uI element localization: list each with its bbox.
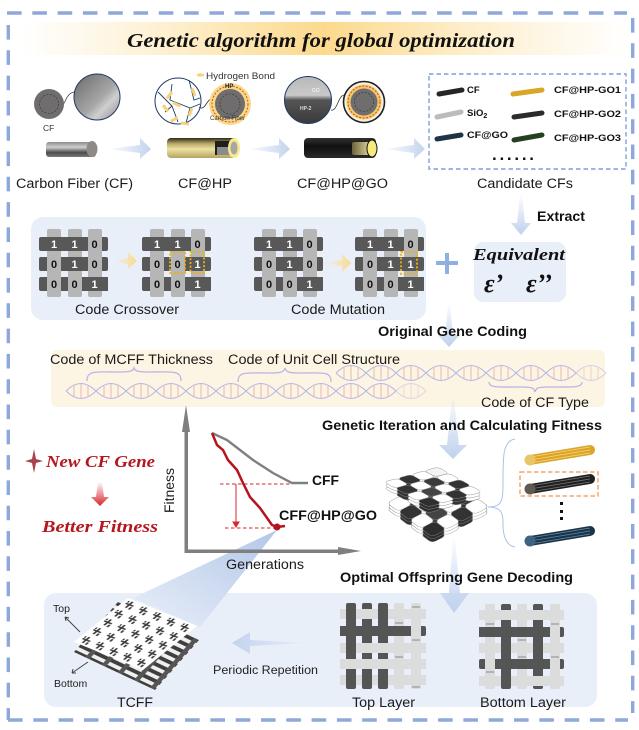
- icon: star: [25, 449, 43, 473]
- arrow: crossover: [112, 252, 137, 269]
- candidate fiber names: CF@GO: [467, 130, 508, 141]
- weave code grid 4 with mutation: 0: [387, 279, 394, 291]
- weave code grid 1: 1: [91, 279, 98, 291]
- candidate fiber names: CF@HP-GO2: [554, 109, 621, 120]
- label: Carbon Fiber (CF): Carbon Fiber (CF): [16, 176, 133, 191]
- label: bottom layer: Bottom Layer: [480, 695, 567, 710]
- weave code grid 3: 0: [306, 239, 313, 251]
- weave code grid 1: 0: [91, 239, 98, 251]
- weave code grid 2 with crossover: 0: [154, 259, 160, 271]
- weave code grid 3: 0: [306, 259, 313, 271]
- candidate fiber names: CF@HP-GO1: [554, 85, 622, 96]
- icon: bare carbon fiber cylinder: [46, 141, 98, 157]
- weave code grid 4 with mutation: 1: [407, 279, 414, 291]
- weave code grid 4 with mutation: 1: [387, 259, 394, 271]
- label: Code Mutation: Code Mutation: [291, 302, 385, 317]
- label: Original Gene Coding: Original Gene Coding: [378, 324, 527, 339]
- weave code grid 2 with crossover: 0: [194, 239, 201, 251]
- bottom sheet: [74, 602, 199, 690]
- x label: Generations: [226, 557, 304, 572]
- callout: new gene better fitness: [25, 449, 158, 536]
- weave code grid 3: 0: [286, 279, 293, 291]
- weave code grid 3: 0: [266, 259, 272, 271]
- legend: hydrogen bond: Hydrogen Bond: [206, 71, 275, 81]
- weave code grid 3: 1: [286, 259, 293, 271]
- label: top layer: Top Layer: [352, 695, 416, 710]
- callout: new gene better fitness: Better Fitness: [41, 517, 158, 536]
- weave code grid 1: [39, 229, 108, 297]
- panel: equivalent permittivity: ε’’: [526, 269, 552, 298]
- curve labels: CFF: [312, 473, 339, 488]
- panel: equivalent permittivity: ε’: [484, 269, 503, 298]
- curve labels: [279, 473, 377, 523]
- label: genetic iteration: Genetic Iteration and Calculating Fitness: [322, 418, 602, 433]
- arrow: CF@HP to CF@HP@GO: [247, 138, 290, 159]
- callout: new gene better fitness: New CF Gene: [45, 452, 155, 471]
- label: CF@HP: CF@HP: [178, 176, 232, 191]
- brace: CF type: [489, 382, 582, 392]
- weave code grid 2 with crossover: 1: [194, 279, 201, 291]
- weave code grid 1: 0: [51, 259, 57, 271]
- arrow: bottom: [72, 662, 88, 673]
- label: Extract: Extract: [537, 209, 586, 224]
- y label: Fitness: [162, 468, 177, 513]
- icon: CF cross section: CF: [43, 123, 54, 133]
- weave code grid 2 with crossover: 1: [174, 239, 181, 251]
- weave: top layer: [340, 603, 426, 689]
- more dots: [560, 502, 563, 520]
- label: Candidate CFs: Candidate CFs: [477, 176, 573, 191]
- top sheet: [74, 598, 197, 670]
- panel: equivalent permittivity: [472, 242, 566, 302]
- weave code grid 1: 0: [51, 279, 57, 291]
- arrow: genetic iteration: [439, 398, 467, 459]
- arrow: mutation: [323, 254, 351, 272]
- weave code grid 4 with mutation: 0: [407, 239, 414, 251]
- icon: microscopy circle: HP-2: [300, 106, 312, 112]
- DNA strand upper: [336, 366, 606, 380]
- label: decoding: Optimal Offspring Gene Decoding: [340, 570, 573, 585]
- reference dashes and drop arrow: [220, 484, 292, 528]
- weave code grid 4 with mutation: 0: [367, 279, 373, 291]
- CFF@HP@GO curve: [212, 433, 285, 530]
- weave code grid 4 with mutation: 1: [407, 259, 414, 271]
- curve labels: CFF@HP@GO: [279, 508, 377, 523]
- title banner: [18, 22, 630, 55]
- title banner: Genetic algorithm for global optimization: [127, 31, 515, 52]
- weave code grid 4 with mutation: 0: [367, 259, 373, 271]
- arrow: decoding: [440, 540, 469, 613]
- icon: microscopy circle: [284, 76, 332, 124]
- arrow: periodic repetition: [232, 632, 310, 654]
- label: TCFF: TCFF: [117, 695, 153, 710]
- brace: unit cell: [238, 368, 331, 382]
- weave code grid 2 with crossover: 0: [154, 279, 160, 291]
- weave code grid 2 with crossover: 0: [174, 259, 181, 271]
- brace: MCFF thickness: [87, 368, 181, 381]
- axes: [182, 405, 361, 555]
- rod: black: [524, 476, 590, 494]
- icon: coated fiber cross section: HP: [225, 84, 233, 90]
- DNA strand lower: [66, 384, 426, 398]
- arrow: top: [65, 617, 80, 632]
- label: code of MCFF thickness: Code of MCFF Thickness: [50, 352, 213, 367]
- weave code grid 1: 1: [51, 239, 57, 251]
- labels: top and bottom: Bottom: [54, 678, 88, 690]
- panel: CF@HP@GO: [284, 76, 388, 191]
- labels: top and bottom: [53, 603, 88, 690]
- chart: fitness against generations: [162, 405, 377, 572]
- weave code grid 4 with mutation: 1: [367, 239, 373, 251]
- icon: GO-coated cross section: [331, 82, 384, 122]
- brace to fiber options: [488, 439, 515, 547]
- icon: coated fiber cross section: [199, 83, 251, 125]
- label: periodic repetition: Periodic Repetition: [213, 665, 318, 677]
- rod: blue: [524, 528, 590, 546]
- weave code grid 1: 0: [71, 279, 78, 291]
- label: code of CF type: Code of CF Type: [481, 395, 589, 410]
- weave code grid 1: 0: [91, 259, 98, 271]
- weave: bottom layer: [479, 604, 564, 689]
- weave code grid 3: 1: [266, 239, 272, 251]
- panel: carbon fiber: [16, 74, 133, 191]
- labels: top and bottom: Top: [53, 603, 70, 615]
- weave code grid 1: 1: [71, 259, 78, 271]
- rod: gold: [524, 447, 590, 466]
- candidate fiber names: CF@HP-GO3: [554, 133, 621, 144]
- bottom panel: periodic structure: [44, 593, 597, 707]
- weave code grid 2 with crossover: 1: [194, 259, 201, 271]
- weave code grid 2 with crossover: 0: [174, 279, 181, 291]
- label: Code Crossover: Code Crossover: [75, 302, 180, 317]
- CFF curve: [212, 433, 308, 483]
- weave code grid 2 with crossover: [142, 229, 211, 297]
- icon: coated fiber cross section: Carbon Fiber: [210, 116, 245, 122]
- label: CF@HP@GO: CF@HP@GO: [297, 176, 388, 191]
- weave code grid 4 with mutation: [355, 229, 424, 297]
- panel: DNA gene code: [50, 350, 606, 410]
- weave code grid 3: 1: [306, 279, 313, 291]
- arrow: extract: [511, 196, 531, 235]
- candidate fiber names: ......: [492, 145, 534, 164]
- candidate fiber names: SiO: [467, 108, 483, 119]
- weave code grid 2 with crossover: 1: [154, 239, 160, 251]
- weave code grid 3: [254, 229, 323, 297]
- candidate fiber names: [467, 85, 622, 164]
- panel: equivalent permittivity: Equivalent: [472, 245, 566, 264]
- panel: code operations: [31, 217, 426, 320]
- icon: TCFF layered structure: [53, 598, 199, 690]
- arrow: red down: [91, 482, 109, 506]
- label: code of unit cell structure: Code of Unit Cell Structure: [228, 352, 400, 367]
- candidate fiber names: 2: [483, 113, 487, 120]
- arrow: CF@HP@GO to candidates: [383, 138, 425, 159]
- candidate fiber names: CF: [467, 85, 480, 96]
- arrow: CF to CF@HP: [107, 138, 151, 159]
- panel: CF@HP: [155, 71, 275, 191]
- icon: plus: [436, 253, 458, 274]
- fiber options: [520, 447, 598, 546]
- highlight box: [520, 472, 598, 496]
- zoom cone to TCFF: [133, 530, 277, 627]
- weave code grid 4 with mutation: 1: [387, 239, 394, 251]
- icon: microscopy circle: GO: [312, 88, 320, 94]
- panel: candidate CFs: [429, 74, 626, 169]
- weave code grid 1: 1: [71, 239, 78, 251]
- arrow: original gene coding: [438, 305, 460, 347]
- candidate fiber rods: [437, 90, 542, 140]
- icon: GO-coated cylinder: [304, 138, 377, 158]
- icon: polymer network: [155, 78, 201, 126]
- weave code grid 3: 1: [286, 239, 293, 251]
- weave code grid 3: 0: [266, 279, 272, 291]
- icon: coated fiber cylinder: [167, 138, 240, 158]
- icon: stacked woven fabric: [384, 467, 489, 543]
